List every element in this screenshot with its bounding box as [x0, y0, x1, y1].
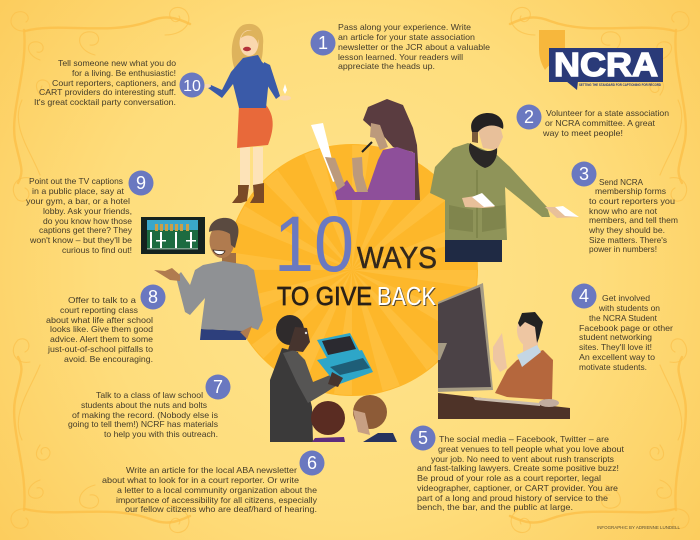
- tip 9 text: won't know – but they'll be: [29, 235, 132, 245]
- tip 4 text: the NCRA Student: [589, 313, 658, 323]
- tip 5 text: The social media – Facebook, Twitter – are: [439, 434, 609, 444]
- tip 9 text: in a public place, say at: [32, 186, 125, 196]
- tip 3 text: Size matters. There's: [589, 235, 667, 245]
- tip 4 text: student networking: [579, 332, 652, 342]
- tip 9 text: [26, 176, 133, 255]
- tip 10 text: Tell someone new what you do: [58, 58, 176, 68]
- figure: man in olive coat: [430, 113, 579, 262]
- badge 5: [410, 426, 436, 450]
- tip 9 text: captions get there? They: [39, 225, 133, 235]
- badge 8: 8: [148, 287, 158, 307]
- logo: NCRA: SETTING THE STANDARD FOR CAPTIONING FOR RECORD: [579, 83, 662, 87]
- tip 8 text: advice. Alert them to some: [50, 334, 153, 344]
- tip 7 text: Talk to a class of law school: [96, 390, 203, 400]
- tip 5 text: bench, the bar, and the public at large.: [417, 502, 573, 512]
- tip 3 text: membership forms: [595, 186, 666, 196]
- tip 2: [516, 104, 669, 138]
- tip 7 text: of making the record. (Nobody else is: [72, 410, 218, 420]
- tip 10 text: Court reporters, captioners, and: [52, 78, 176, 88]
- tip 4 text: [579, 293, 673, 372]
- tip 3 text: why they should be.: [588, 225, 665, 235]
- tip 5 text: Be proud of your role as a court reporter, legal: [417, 473, 601, 483]
- tip 7 text: students about the nuts and bolts: [81, 400, 207, 410]
- tip 5 text: and fast-talking lawyers. Create some positive buzz!: [417, 463, 619, 473]
- tip 6 text: importance of accessibility for all citizens, especially: [116, 495, 318, 505]
- tip 8 text: [46, 295, 153, 364]
- tip 5: [410, 426, 625, 512]
- logo: NCRA: [539, 30, 663, 90]
- tip 4 text: Facebook page or other: [579, 323, 673, 333]
- tip 4 text: sites. They'll love it!: [579, 342, 652, 352]
- badge 10: [180, 72, 204, 98]
- tip 9 text: lobby. Ask your friends,: [43, 206, 132, 216]
- badge 10: 10: [183, 78, 201, 95]
- tip 1: [310, 22, 490, 71]
- icon: stenograph: [317, 333, 373, 385]
- badge 4: 4: [579, 286, 589, 306]
- central sun: [226, 144, 478, 396]
- tip 3 text: Send NCRA: [599, 177, 643, 187]
- tip 6 text: Write an article for the local ABA newsletter: [126, 465, 297, 475]
- tip 5 text: part of a long and proud history of service to the: [417, 493, 608, 503]
- tip 10: [34, 58, 204, 107]
- tip 3 text: to court reporters you: [589, 196, 675, 206]
- tip 3 text: members, and tell them: [589, 215, 678, 225]
- tip 6 text: a letter to a local community organization about the: [117, 485, 317, 495]
- tip 9: [26, 170, 154, 255]
- badge 2: 2: [524, 107, 534, 127]
- figure: man with TV captions: [141, 217, 263, 340]
- title: WAYS: [357, 240, 437, 275]
- logo: NCRA: NCRA: [554, 46, 658, 83]
- tip 8 text: looks like. Give them good: [50, 324, 153, 334]
- tip 7: [68, 374, 230, 439]
- tip 3 text: power in numbers!: [589, 244, 657, 254]
- icon: TV with captions: [141, 217, 205, 254]
- tip 10 text: for a living. Be enthusiastic!: [72, 68, 176, 78]
- title: [274, 199, 438, 312]
- tip 7 text: to help you with this outreach.: [104, 429, 218, 439]
- figure: man at computer: [438, 283, 570, 419]
- title: BACK: [377, 281, 437, 311]
- tip 9 text: Point out the TV captions: [29, 176, 123, 186]
- tip 4 text: motivate students.: [579, 362, 647, 372]
- tip 4: [572, 284, 673, 372]
- tip 10 text: It's great cocktail party conversation.: [34, 97, 176, 107]
- tip 8: [46, 284, 166, 364]
- tip 9 text: curious to find out!: [62, 245, 132, 255]
- tip 10 text: CART providers do interesting stuff.: [39, 87, 176, 97]
- tip 7 text: [68, 390, 218, 439]
- badge 1: 1: [318, 33, 328, 53]
- badge 3: 3: [579, 164, 589, 184]
- tip 1 text: newsletter or the JCR about a valuable: [338, 42, 490, 52]
- tip 8 text: just-out-of-school pitfalls to: [47, 344, 153, 354]
- badge 7: [206, 374, 230, 400]
- tip 4 text: with students on: [598, 303, 660, 313]
- figure: man with stenograph and two students: [270, 315, 397, 442]
- tip 8 text: court reporting class: [60, 305, 138, 315]
- tip 1 text: an article for your state association: [338, 32, 475, 42]
- tip 4 text: An excellent way to: [579, 352, 655, 362]
- badge 6: [300, 450, 324, 476]
- tip 7 text: going to tell them!) NCRF has materials: [68, 419, 218, 429]
- figure: woman reading with pen: [311, 99, 420, 200]
- tip 8 text: avoid. Be encouraging.: [64, 354, 153, 364]
- badge 7: 7: [213, 377, 223, 397]
- tip 5 text: your job. No need to vent about rush transcripts: [431, 454, 614, 464]
- tip 4 text: Get involved: [602, 293, 650, 303]
- badge 2: [516, 104, 542, 130]
- tip 5 text: great venues to tell people what you love about: [438, 444, 625, 454]
- tip 2 text: Volunteer for a state association: [546, 108, 669, 118]
- tip 2 text: way to meet people!: [542, 128, 623, 138]
- badge 5: 5: [418, 428, 428, 448]
- tip 6: [102, 450, 324, 514]
- tip 3 text: [588, 177, 678, 254]
- tip 2 text: [542, 108, 669, 138]
- tip 6 text: about what to look for in a court reporter. Or write: [102, 475, 299, 485]
- tip 8 text: Offer to talk to a: [68, 295, 136, 305]
- tip 9 text: do you know how those: [43, 216, 132, 226]
- tip 3: [572, 162, 678, 254]
- tip 10 text: [34, 58, 176, 107]
- tip 2 text: or NCRA committee. A great: [545, 118, 656, 128]
- figure: woman in orange skirt: [203, 24, 291, 203]
- title: BACK: [378, 282, 438, 312]
- badge 6: 6: [307, 453, 317, 473]
- tip 3 text: know who are not: [589, 206, 658, 216]
- credit: INFOGRAPHIC BY ADRIENNE LUNDELL: [597, 525, 680, 530]
- badge 1: [310, 30, 336, 56]
- tip 8 text: about what life after school: [46, 315, 153, 325]
- tip 1 text: Pass along your experience. Write: [338, 22, 471, 32]
- tip 9 text: your gym, a bar, or a hotel: [26, 196, 130, 206]
- tip 6 text: [102, 465, 318, 514]
- badge 9: 9: [136, 173, 146, 193]
- tip 5 text: videographer, captioner, or CART provider. You are: [417, 483, 618, 493]
- title: TO GIVE: [277, 281, 372, 311]
- title: 10: [274, 199, 354, 288]
- tip 1 text: [338, 22, 490, 71]
- tip 6 text: our fellow citizens who are deaf/hard of hearing.: [125, 504, 317, 514]
- tip 1 text: appreciate the heads up.: [338, 61, 435, 71]
- tip 5 text: [417, 434, 625, 512]
- tip 1 text: lesson learned. Your readers will: [338, 52, 463, 62]
